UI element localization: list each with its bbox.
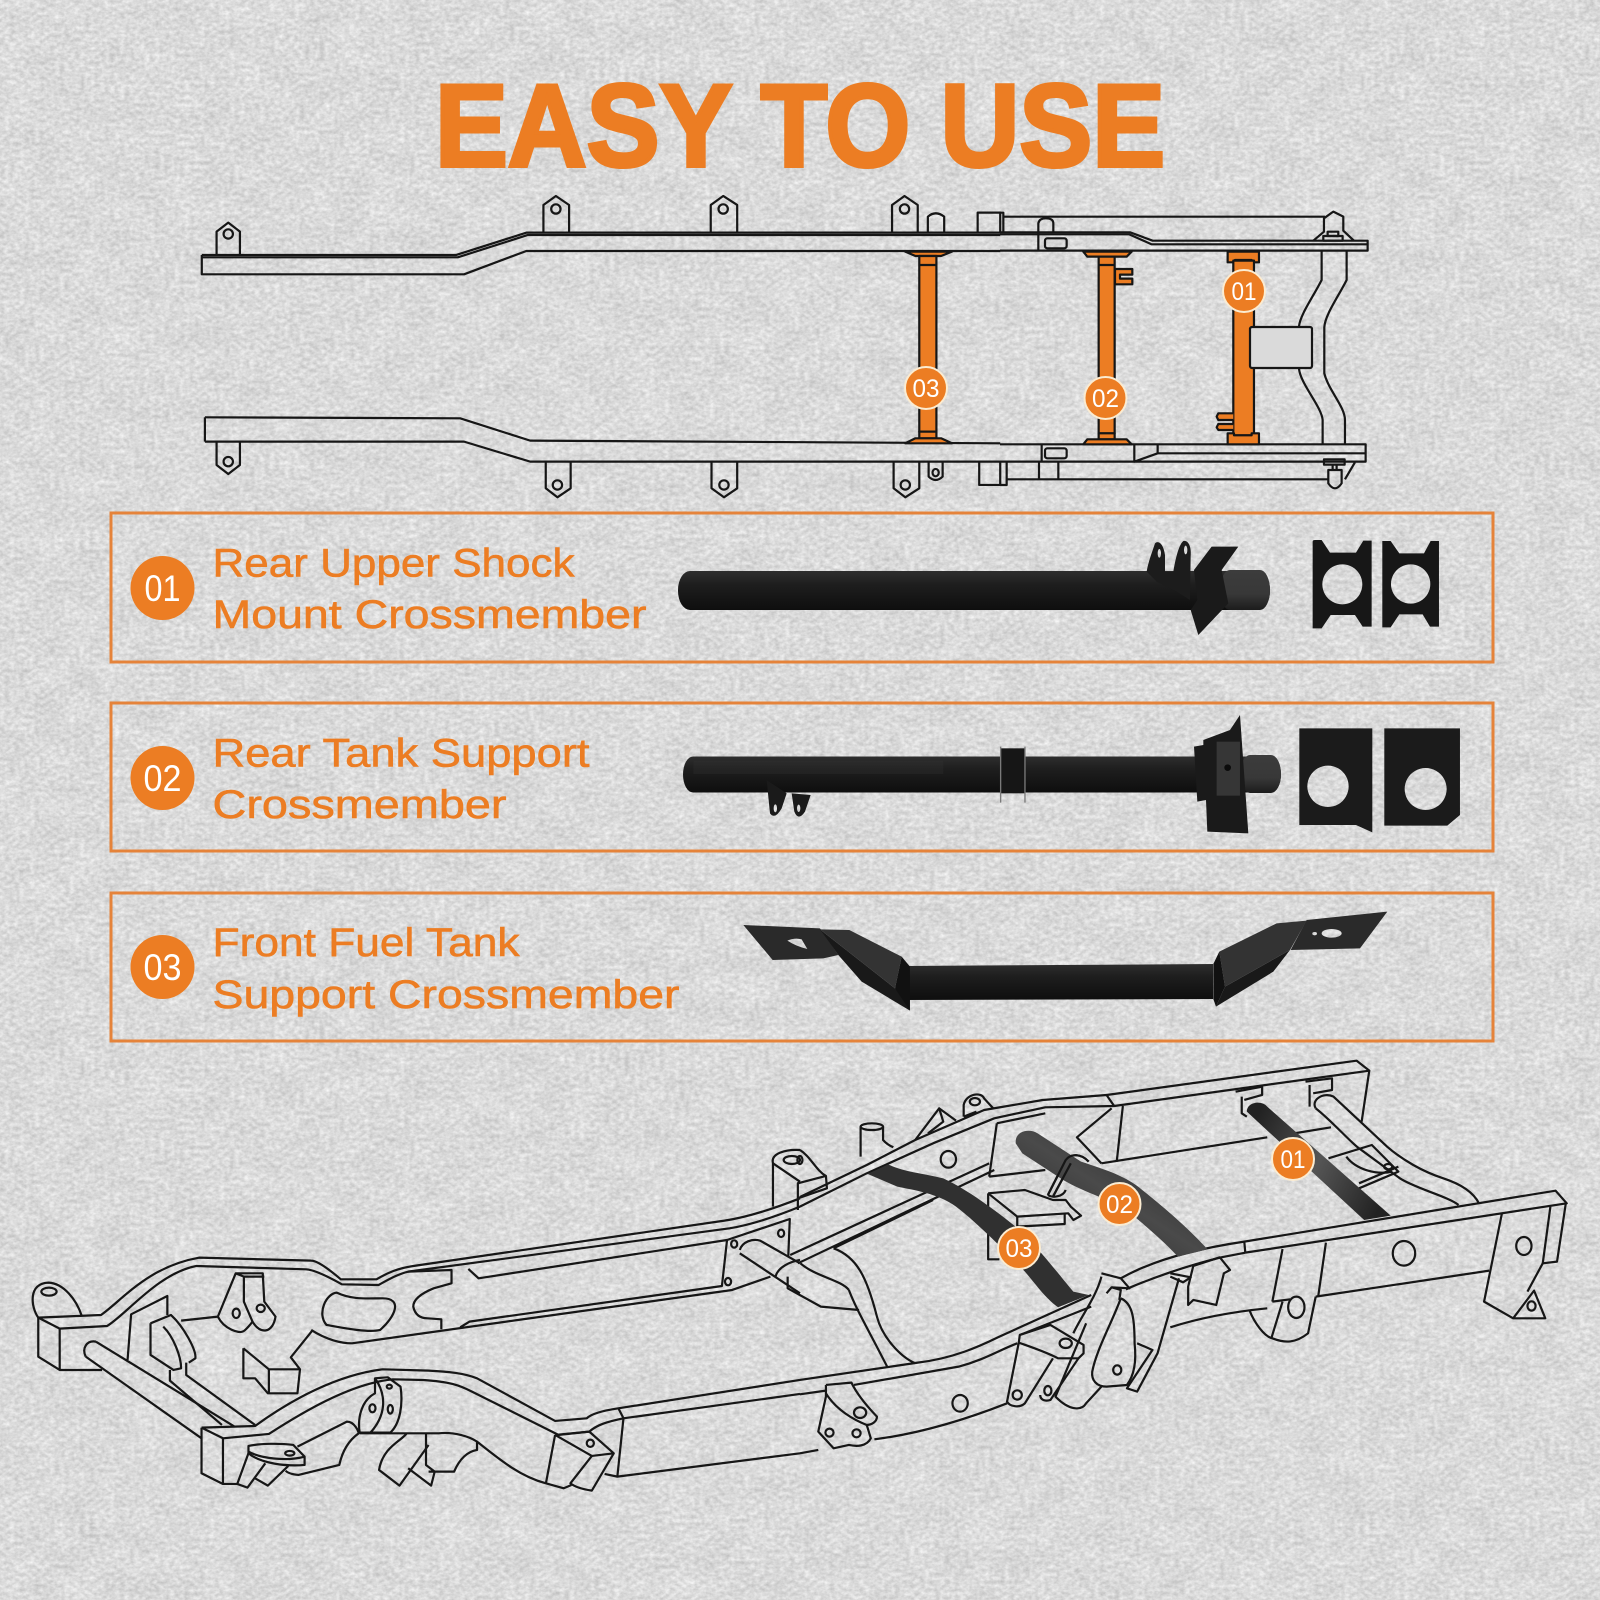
badge 02 on frame: 02 xyxy=(1106,1191,1133,1219)
badge 03 xyxy=(905,367,947,409)
label 03: Front Fuel Tank xyxy=(212,921,521,965)
crossmember 01 highlight xyxy=(1217,252,1259,444)
panel 01: rear upper shock mount crossmember xyxy=(111,513,1493,662)
label 02: Rear Tank Support xyxy=(212,732,590,776)
crossmember 03 highlight xyxy=(905,252,952,443)
part photo: shock mount tube xyxy=(678,541,1270,635)
highlighted tube 01 xyxy=(1247,1103,1391,1220)
label 03: Support Crossmember xyxy=(212,973,680,1017)
number badge 03 xyxy=(130,935,194,999)
number badge 02: 02 xyxy=(144,758,182,799)
panel 02 border xyxy=(111,703,1493,851)
panel 01 border xyxy=(111,513,1493,662)
frame front section line art xyxy=(33,1150,800,1491)
highlighted tube 02 xyxy=(1016,1131,1208,1257)
label 01: Rear Upper Shock xyxy=(212,542,576,586)
number badge 01: 01 xyxy=(144,568,180,609)
label 01: Mount Crossmember xyxy=(212,593,646,637)
badge 02 on frame xyxy=(1098,1183,1140,1225)
frame centre plate xyxy=(1250,327,1312,368)
frame rear section line art xyxy=(788,1061,1567,1453)
crossmember 02 highlight xyxy=(1083,252,1132,444)
panel 02: rear tank support crossmember xyxy=(111,703,1493,851)
badge 03 on frame: 03 xyxy=(1006,1235,1032,1263)
badge 02 xyxy=(1084,377,1126,419)
badge 01 xyxy=(1223,270,1265,312)
badge 01 on frame: 01 xyxy=(1280,1146,1306,1174)
part photo: tank support tube xyxy=(683,715,1281,833)
highlighted tube 03 xyxy=(868,1164,1089,1307)
clamp over tube 02 xyxy=(1048,1155,1089,1197)
part photo: shock mount plates xyxy=(1313,540,1439,628)
part photo: tank support plates xyxy=(1299,728,1460,832)
badge 01 on frame xyxy=(1272,1138,1314,1180)
number badge 03: 03 xyxy=(144,947,182,988)
number badge 01 xyxy=(130,556,194,620)
badge 01: 01 xyxy=(1232,278,1256,306)
top view frame diagram xyxy=(202,196,1368,497)
panel 03 border xyxy=(111,893,1493,1041)
frame rails left part xyxy=(202,196,1000,497)
badge 02: 02 xyxy=(1092,385,1119,413)
3D perspective frame diagram xyxy=(33,1061,1567,1491)
part photo: front crossmember xyxy=(743,912,1387,1011)
title: EASY TO USE xyxy=(435,60,1165,191)
panel 03: front fuel tank support crossmember xyxy=(111,893,1493,1041)
label 02: Crossmember xyxy=(212,783,506,827)
frame rails right part xyxy=(1000,212,1368,488)
badge 03 on frame xyxy=(998,1227,1040,1269)
badge 03: 03 xyxy=(912,375,940,403)
number badge 02 xyxy=(130,746,194,810)
